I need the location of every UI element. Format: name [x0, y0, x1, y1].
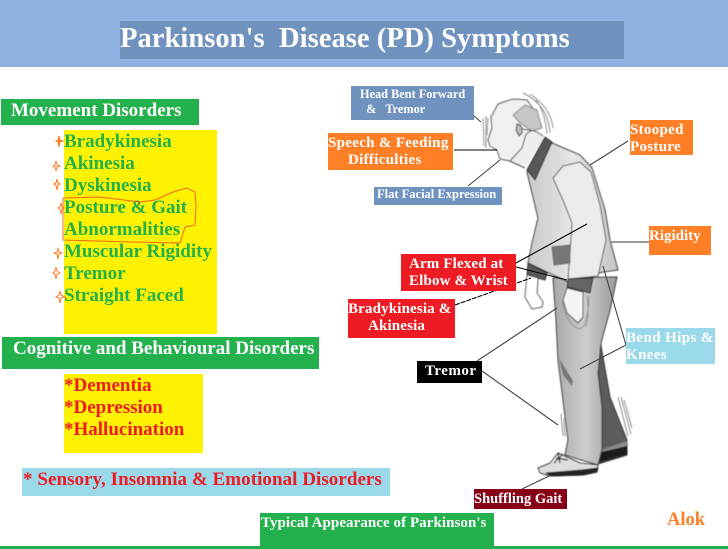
- panel: movement disorders list: Muscular Rigidity: [64, 241, 212, 262]
- label: rigidity: [649, 226, 711, 255]
- panel: sensory disorders: * Sensory, Insomnia & Emotional Disorders: [23, 469, 382, 490]
- callout lines: [454, 116, 650, 489]
- shoe: [538, 453, 598, 476]
- panel: movement disorders list: Dyskinesia: [64, 175, 152, 196]
- ear: [516, 124, 522, 136]
- label: flat facial expression: Flat Facial Expression: [377, 187, 496, 201]
- hand tremor lines: [562, 296, 589, 329]
- label: speech and feeding difficulties: [328, 133, 453, 170]
- caption: typical appearance: [260, 513, 494, 546]
- neck and head: [510, 125, 545, 168]
- heading: cognitive and behavioural disorders: Cognitive and Behavioural Disorders: [13, 338, 314, 359]
- label: bend hips and knees: Bend Hips & Knees: [626, 330, 714, 363]
- panel: movement disorders list: Posture & Gait: [64, 197, 187, 218]
- title banner: [0, 0, 728, 67]
- collar: [527, 137, 552, 180]
- panel: cognitive disorders list: *Hallucination: [64, 419, 184, 440]
- caption: typical appearance: Typical Appearance of Parkinson's: [261, 515, 486, 531]
- tremor marks: [483, 93, 632, 436]
- panel: cognitive disorders list: [64, 374, 203, 453]
- pocket: [552, 245, 570, 265]
- torso: [527, 143, 618, 282]
- label: head bent forward and tremor: Head Bent Forward & Tremor: [360, 87, 465, 116]
- panel: movement disorders list: Bradykinesia: [64, 131, 172, 152]
- label: speech and feeding difficulties: Speech & Feeding: [328, 135, 449, 151]
- panel: cognitive disorders list: *Dementia: [64, 375, 152, 396]
- panel: movement disorders list: Akinesia: [64, 153, 135, 174]
- heading: movement disorders: [1, 99, 199, 125]
- panel: movement disorders list: Tremor: [64, 263, 126, 284]
- bottom green rule: [0, 546, 728, 549]
- rear leg: [592, 340, 627, 464]
- label: bradykinesia and akinesia: Akinesia: [368, 318, 425, 334]
- panel: movement disorders list: Abnormalities: [64, 219, 180, 240]
- label: bradykinesia and akinesia: [348, 299, 455, 338]
- credit: alok: Alok: [667, 510, 705, 530]
- label: bradykinesia and akinesia: Bradykinesia &: [348, 301, 451, 317]
- heading: cognitive and behavioural disorders: [2, 337, 319, 369]
- heading: movement disorders: Movement Disorders: [11, 100, 181, 121]
- front leg: [553, 277, 617, 465]
- cuffs: [527, 263, 547, 280]
- panel: movement disorders list: [52, 130, 217, 334]
- title: Parkinson's Disease (PD) Symptoms: [120, 23, 570, 54]
- label: rigidity: Rigidity: [649, 228, 701, 244]
- hands: [525, 275, 543, 309]
- panel: cognitive disorders list: *Depression: [64, 397, 163, 418]
- label: shuffling gait: Shuffling Gait: [474, 491, 562, 507]
- label: tremor: Tremor: [425, 363, 477, 379]
- hand-drawn circle around posture and gait: [63, 188, 196, 243]
- panel: movement disorders list: Straight Faced: [64, 285, 184, 306]
- label: arm flexed at elbow and wrist: Arm Flexed at Elbow & Wrist: [409, 256, 508, 289]
- label: stooped posture: Stooped Posture: [630, 122, 684, 155]
- arm sleeve: [553, 162, 606, 279]
- label: speech and feeding difficulties: Difficulties: [348, 152, 422, 168]
- label: tremor: [417, 361, 482, 383]
